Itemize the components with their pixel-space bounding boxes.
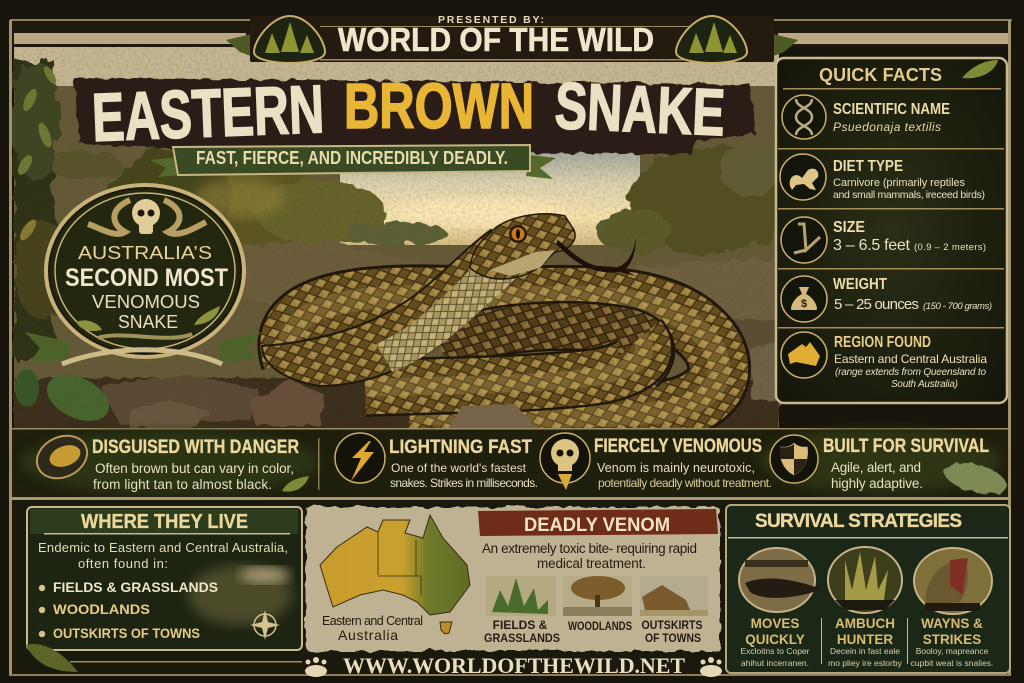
strategy: ambush hunter: AMBUCH: [835, 616, 895, 631]
title text: [91, 68, 726, 156]
strategy: ambush hunter: HUNTER: [837, 632, 893, 647]
feature: lightning fast: snakes. Strikes in milliseconds.: [390, 476, 538, 490]
mini scene: outskirts of towns: OUTSKIRTS: [642, 618, 702, 632]
mini scene: outskirts of towns: [640, 576, 708, 645]
fact: weight: [781, 276, 992, 322]
tongue: [556, 237, 636, 276]
footer area: [10, 500, 1010, 676]
strategy: moves quickly: MOVES: [751, 616, 799, 631]
strategy: ambush hunter: [828, 547, 903, 668]
fact: size: [781, 217, 986, 263]
map of Australia: [320, 515, 470, 643]
fact: weight: (150 - 700 grams): [923, 301, 992, 312]
logo badge left: [254, 16, 325, 63]
fact: weight: $: [801, 298, 807, 310]
snake: [262, 214, 719, 432]
panel: map and deadly venom: An extremely toxic bite- requiring rapid: [482, 541, 697, 556]
logo badge right: [676, 16, 747, 63]
fact: region found: (range extends from Queensland to: [835, 367, 986, 378]
subtitle ribbon: FAST, FIERCE, AND INCREDIBLY DEADLY.: [196, 148, 508, 168]
fact: size: 3 – 6.5 feet: [833, 237, 911, 254]
plant: broad leaves: [15, 366, 116, 430]
corner leaf: [26, 644, 78, 672]
snake ornaments: [88, 200, 206, 234]
feature: lightning fast: [335, 433, 538, 490]
mini scene: woodlands: WOODLANDS: [568, 619, 632, 633]
fact: diet type: and small mammals, ireceed birds): [833, 189, 985, 201]
background scene: [12, 45, 790, 435]
panel: where they live: [26, 507, 302, 672]
panel: map and deadly venom: DEADLY VENOM: [524, 515, 670, 536]
fact: diet type: [780, 154, 985, 201]
feature: fiercely venomous: [540, 433, 772, 490]
mini scene: woodlands: [563, 576, 632, 633]
fact: region found: [781, 332, 987, 390]
presented by: PRESENTED BY:: [438, 14, 544, 26]
fern: [940, 456, 1010, 500]
title band: [74, 68, 756, 156]
inner coil front: [365, 338, 644, 388]
venom badge: [25, 183, 262, 364]
strategy: ambush hunter: mo pliey ire estorby: [828, 658, 903, 668]
jaw: [490, 250, 555, 276]
feature: lightning fast: LIGHTNING FAST: [389, 437, 532, 458]
strategy: warns and strikes: Booloy, mapreance: [916, 646, 989, 656]
badge leaf right: [194, 306, 220, 325]
skull: [132, 199, 160, 234]
strategy: warns and strikes: [911, 548, 993, 668]
fact: diet type: Carnivore (primarily reptiles: [833, 177, 966, 189]
head: [470, 214, 575, 279]
strategy: warns and strikes: cupbit weat is snalies.: [911, 658, 993, 668]
strategy: warns and strikes: WAYNS &: [921, 616, 983, 631]
feature: fiercely venomous: potentially deadly without treatment.: [598, 476, 772, 490]
deadly venom heading: [478, 509, 718, 536]
feature: fiercely venomous: Venom is mainly neurotoxic,: [597, 461, 755, 475]
panel: where they live: often found in:: [78, 556, 168, 571]
feature: disguised with danger: from light tan to almost black.: [93, 477, 272, 492]
mini scene: grasslands: GRASSLANDS: [484, 631, 560, 645]
compass: [250, 610, 280, 640]
foreground rocks: [14, 340, 779, 433]
back coil: [289, 296, 719, 417]
fact: weight: 5 – 25 ounces: [834, 296, 919, 313]
feature: built for survival: [770, 435, 1010, 500]
title text: EASTERN: [91, 71, 325, 156]
mini scene: outskirts of towns: OF TOWNS: [645, 631, 701, 645]
strategy: warns and strikes: STRIKES: [923, 632, 981, 647]
eye: [509, 225, 527, 243]
mini scene: grasslands: [484, 576, 560, 645]
scroll ornament: [98, 334, 192, 338]
foreground stones: [446, 404, 540, 432]
panel: survival strategies: [726, 505, 1010, 673]
left foliage: [12, 60, 121, 360]
feature: disguised with danger: Often brown but can vary in color,: [95, 461, 294, 476]
strategy: moves quickly: Excloitns to Coper: [741, 646, 810, 656]
strategy: moves quickly: [739, 548, 822, 668]
inner coil top loop: [440, 326, 650, 370]
title text: SNAKE: [553, 68, 726, 149]
habitat list: FIELDS & GRASSLANDS: [53, 579, 218, 595]
fact: scientific name: [782, 95, 950, 139]
fact: size: SIZE: [833, 219, 865, 236]
panel: map and deadly venom: [306, 507, 720, 651]
feature: built for survival: highly adaptive.: [831, 476, 923, 491]
title text: BROWN: [344, 70, 534, 142]
venom badge: SNAKE: [118, 312, 178, 332]
curved ribbon: [62, 350, 222, 364]
feature: lightning fast: One of the world's fastest: [391, 461, 527, 475]
strategy: ambush hunter: Decein in fast eale: [830, 646, 900, 656]
fact: region found: Eastern and Central Australia: [834, 352, 987, 366]
venom badge: VENOMOUS: [92, 292, 200, 312]
subtitle ribbon: [150, 145, 556, 179]
panel heading: QUICK FACTS: [819, 65, 942, 85]
neck: [262, 230, 545, 386]
dividers: [778, 88, 1004, 328]
feature: disguised with danger: DISGUISED WITH DANGER: [92, 437, 299, 458]
strategy: moves quickly: QUICKLY: [745, 632, 805, 647]
panel: survival strategies: SURVIVAL STRATEGIES: [755, 511, 962, 532]
fact: size: (0.9 – 2 meters): [914, 242, 986, 253]
header banner: World of the Wild: [226, 14, 798, 63]
map of Australia: Australia: [338, 627, 398, 643]
panel: where they live: WHERE THEY LIVE: [81, 511, 248, 533]
habitat list: WOODLANDS: [53, 601, 150, 617]
website footer: WWW.WORLDOFTHEWILD.NET: [343, 653, 685, 678]
panel: where they live: Endemic to Eastern and Central Australia,: [38, 540, 288, 555]
map of Australia: Eastern and Central: [322, 614, 423, 628]
fact: weight: WEIGHT: [833, 276, 887, 293]
habitat list: OUTSKIRTS OF TOWNS: [53, 625, 200, 641]
badge leaf left: [76, 320, 102, 331]
foliage leaves: [15, 64, 58, 243]
fact: scientific name: Psuedonaja textilis: [833, 120, 941, 134]
feature: built for survival: BUILT FOR SURVIVAL: [823, 436, 989, 457]
neck belly: [376, 264, 530, 372]
venom badge: AUSTRALIA’S: [78, 242, 212, 263]
paw right: [700, 657, 722, 677]
mini scene: grasslands: FIELDS &: [493, 618, 548, 632]
panel leaf: [962, 60, 998, 78]
feature: built for survival: Agile, alert, and: [831, 460, 921, 475]
feature: disguised with danger: [30, 428, 309, 492]
feature: fiercely venomous: FIERCELY VENOMOUS: [594, 436, 762, 457]
leaf: [282, 476, 309, 492]
brand name: WORLD OF THE WILD: [338, 21, 654, 58]
panel: map and deadly venom: medical treatment.: [537, 556, 646, 571]
fact: diet type: DIET TYPE: [833, 158, 903, 175]
fact: scientific name: SCIENTIFIC NAME: [833, 101, 950, 118]
habitat list: [39, 579, 218, 641]
fact: region found: South Australia): [891, 379, 958, 390]
venom badge: SECOND MOST: [65, 264, 228, 292]
paw left: [305, 657, 327, 677]
features strip: [10, 428, 1010, 500]
fact: region found: REGION FOUND: [834, 334, 931, 351]
panel: quick facts: [776, 58, 1007, 403]
strategy: moves quickly: ahihut incerranen.: [741, 658, 809, 668]
